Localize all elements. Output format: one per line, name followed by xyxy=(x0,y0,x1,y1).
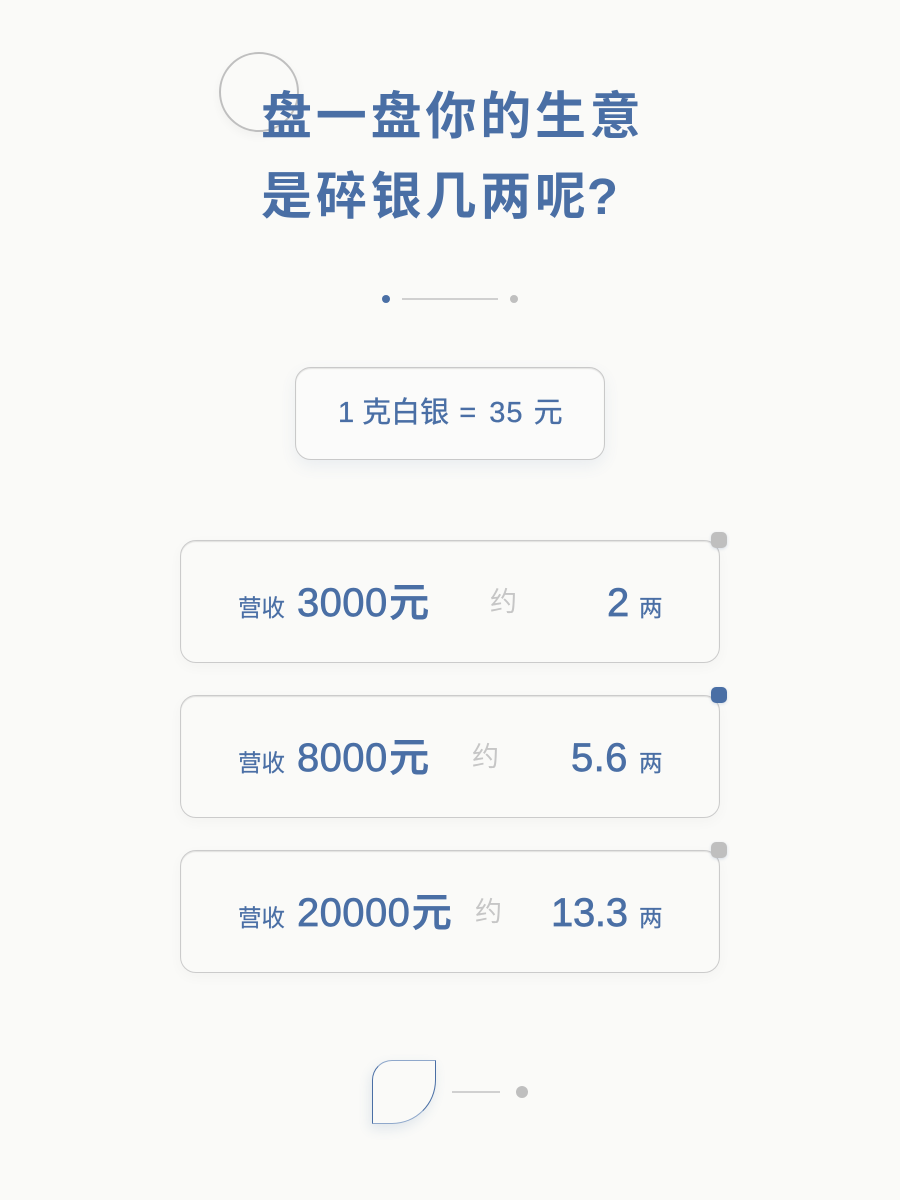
card 1 xyxy=(180,540,720,663)
conversion text: 1 克白银 = 35 元 xyxy=(338,397,563,429)
card 2 corner dot xyxy=(711,687,727,703)
silver amount: 5.6 xyxy=(571,736,628,780)
decorative circle xyxy=(219,52,299,132)
card 3 corner dot xyxy=(711,842,727,858)
revenue amount: 20000元 xyxy=(297,891,452,935)
silver unit: 两 xyxy=(639,595,662,621)
footer line xyxy=(452,1091,500,1093)
title: 盘一盘你的生意 xyxy=(261,88,645,145)
about label: 约 xyxy=(490,587,517,617)
conversion box xyxy=(295,367,605,460)
title: 是碎银几两呢? xyxy=(261,168,618,225)
silver amount: 13.3 xyxy=(551,891,628,935)
card 3 xyxy=(180,850,720,973)
revenue label: 营收 xyxy=(238,750,285,776)
footer dot xyxy=(516,1086,528,1098)
leaf icon xyxy=(372,1060,436,1124)
title xyxy=(261,88,645,225)
divider: dots and line xyxy=(382,295,518,303)
about label: 约 xyxy=(475,897,502,927)
revenue amount: 3000元 xyxy=(297,581,430,625)
silver unit: 两 xyxy=(639,905,662,931)
revenue amount: 8000元 xyxy=(297,736,430,780)
card 2 xyxy=(180,695,720,818)
card 1 corner dot xyxy=(711,532,727,548)
silver unit: 两 xyxy=(639,750,662,776)
silver amount: 2 xyxy=(607,581,630,625)
revenue label: 营收 xyxy=(238,905,285,931)
revenue label: 营收 xyxy=(238,595,285,621)
about label: 约 xyxy=(472,742,499,772)
